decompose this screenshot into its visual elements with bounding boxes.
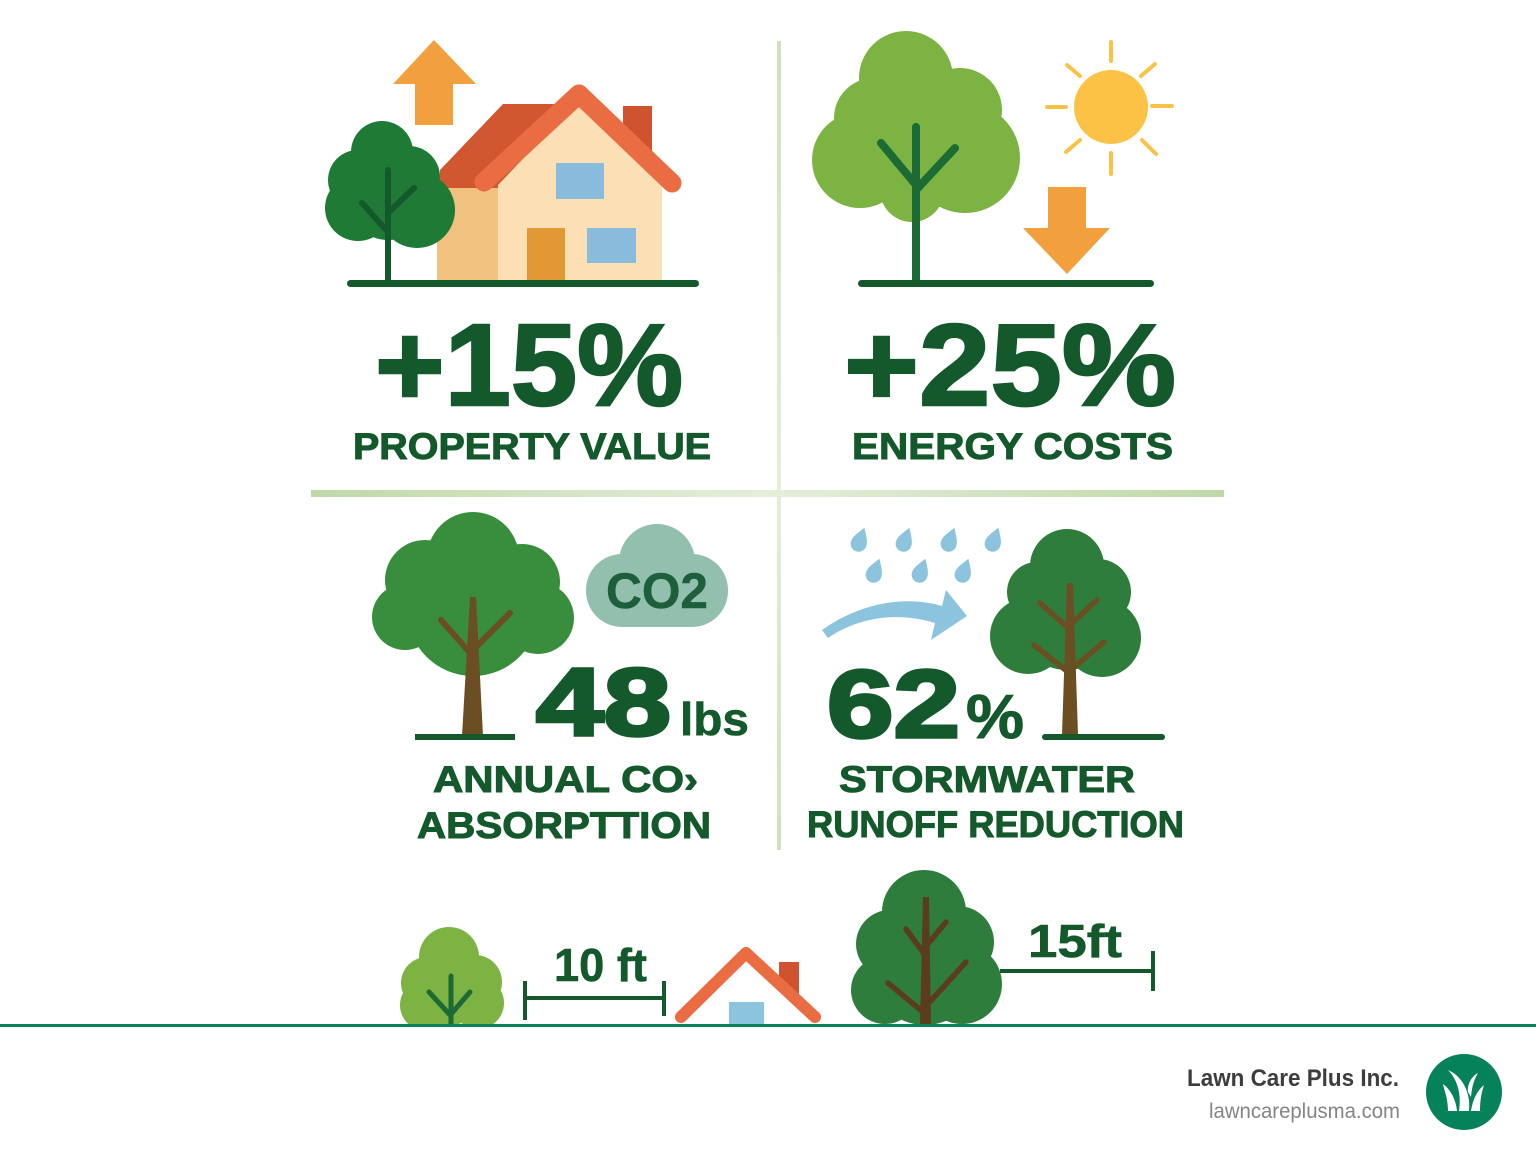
icon: down arrow (1023, 187, 1110, 274)
icon: house (437, 94, 672, 280)
stat: +25%: +25% (844, 300, 1176, 430)
stat: 48 lbs (536, 649, 749, 756)
icon: small tree (400, 927, 504, 1031)
label: stormwater runoff reduction (807, 759, 1184, 845)
stat: 62%: 62 (827, 651, 960, 758)
ground line (347, 280, 699, 287)
stat: +15%: +15% (375, 300, 683, 430)
icon: large tree (851, 870, 1002, 1025)
icon: grass logo (1426, 1054, 1502, 1130)
label: energy costs: ENERGY COSTS (852, 426, 1173, 467)
icon: tree (372, 512, 574, 736)
icon: rain drops (848, 525, 1006, 585)
measure: 10 ft: 10 ft (554, 939, 647, 991)
icon: small house (681, 953, 815, 1025)
panel: property value (325, 40, 711, 467)
panel: CO2 absorption (372, 512, 749, 846)
label: annual CO2 absorption (417, 759, 711, 846)
label: annual CO2 absorption: ANNUAL CO› (433, 759, 698, 800)
icon: CO2 cloud (586, 524, 728, 627)
stat: 62% (827, 651, 1024, 758)
icon: sun (1047, 42, 1172, 174)
panel: planting distance diagram (400, 870, 1153, 1031)
icon: tree (990, 529, 1141, 735)
icon: up arrow (393, 40, 476, 125)
panel: stormwater runoff (807, 525, 1184, 845)
ground line (1042, 734, 1165, 740)
footer divider (0, 1024, 1536, 1027)
brand name: Lawn Care Plus Inc. (1187, 1065, 1399, 1092)
label: annual CO2 absorption: ABSORPTTION (417, 805, 711, 846)
footer: brand (1187, 1054, 1502, 1130)
measure: 15 ft (1000, 915, 1153, 991)
ground line (858, 280, 1154, 287)
icon: CO2 cloud: CO2 (606, 563, 708, 619)
stat: 62%: % (966, 683, 1024, 752)
label: stormwater runoff reduction: STORMWATER (839, 759, 1135, 800)
icon: tree (812, 31, 1020, 282)
label: property value: PROPERTY VALUE (353, 426, 711, 467)
icon: runoff arrow (822, 590, 967, 640)
label: stormwater runoff reduction: RUNOFF REDUCTION (807, 804, 1184, 845)
measure: 10 ft (525, 939, 664, 1020)
measure: 15 ft: 15ft (1028, 915, 1122, 967)
ground line (415, 734, 515, 740)
stat: 48 lbs: 48 (536, 649, 671, 756)
panel: energy costs (812, 31, 1176, 467)
icon: tree (325, 121, 455, 282)
stat: 48 lbs: lbs (680, 693, 749, 745)
brand url: lawncareplusma.com (1209, 1099, 1400, 1123)
